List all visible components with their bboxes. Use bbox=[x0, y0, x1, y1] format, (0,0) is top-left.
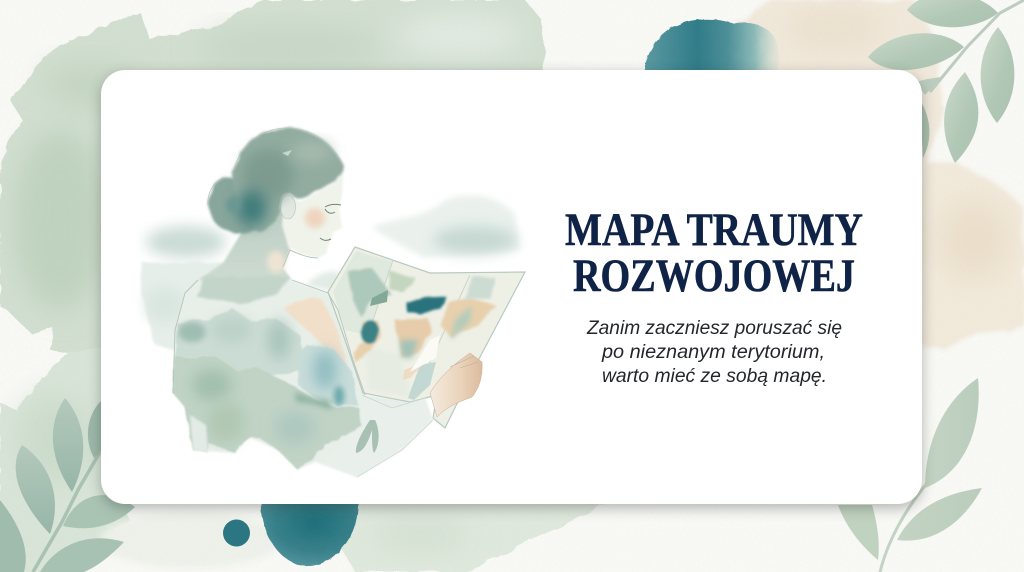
face bbox=[282, 172, 343, 258]
fingers bbox=[450, 356, 478, 368]
green wash bottom bbox=[340, 500, 610, 572]
title bbox=[565, 204, 863, 302]
illustration: woman reading a map bbox=[140, 126, 526, 478]
europe bbox=[407, 296, 446, 314]
teal blob bottom bbox=[261, 500, 358, 566]
asia bbox=[440, 298, 497, 338]
head outline bbox=[208, 128, 343, 205]
sleeve tie bbox=[356, 420, 379, 453]
south america bbox=[353, 320, 382, 362]
map fold lines bbox=[367, 260, 470, 395]
mountain layer lower bbox=[173, 345, 362, 470]
mountain layer upper bbox=[175, 308, 305, 375]
teal dot bbox=[223, 520, 250, 546]
hand bbox=[430, 353, 482, 417]
leaves bottom left bbox=[0, 398, 135, 572]
subtitle line 2: po nieznanym terytorium, bbox=[601, 341, 825, 363]
cheek bbox=[305, 208, 325, 228]
map bbox=[328, 247, 525, 428]
white card bbox=[101, 70, 922, 504]
map lower wash bbox=[365, 345, 412, 398]
central teal patch bbox=[370, 290, 388, 306]
body outline bbox=[173, 280, 365, 395]
body silhouette bbox=[173, 280, 432, 477]
subtitle bbox=[586, 317, 842, 387]
green wash top and left bbox=[0, 0, 545, 355]
north america bbox=[347, 268, 392, 318]
leaves top right bbox=[868, 0, 1024, 163]
neck bbox=[198, 205, 292, 280]
teal blob top bbox=[644, 19, 779, 72]
beige wash top right bbox=[720, 0, 945, 170]
sleeve outline bbox=[357, 395, 433, 477]
hair bbox=[208, 128, 343, 233]
subtitle line 1: Zanim zaczniesz poruszać się bbox=[586, 317, 842, 339]
shoulder green band bbox=[196, 277, 290, 304]
mist right bbox=[305, 195, 520, 292]
greenland bbox=[388, 270, 417, 292]
map panel shading bbox=[333, 251, 393, 335]
subtitle line 3: warto mieć ze sobą mapę. bbox=[602, 365, 827, 387]
ear bbox=[280, 195, 296, 219]
peach shoulder bbox=[285, 298, 348, 368]
neck peach tint bbox=[267, 251, 285, 273]
leaves bottom right bbox=[838, 378, 982, 572]
eye and mouth bbox=[320, 204, 341, 240]
green wash bottom left bbox=[0, 345, 280, 572]
mist left bbox=[142, 226, 232, 352]
map sheet bbox=[328, 247, 525, 428]
sleeve bbox=[325, 395, 433, 477]
beige wash right bbox=[905, 160, 1024, 345]
lower panel patches bbox=[408, 362, 436, 400]
africa bbox=[395, 318, 432, 358]
jaw line bbox=[283, 250, 318, 267]
arctic panel bbox=[465, 277, 495, 300]
